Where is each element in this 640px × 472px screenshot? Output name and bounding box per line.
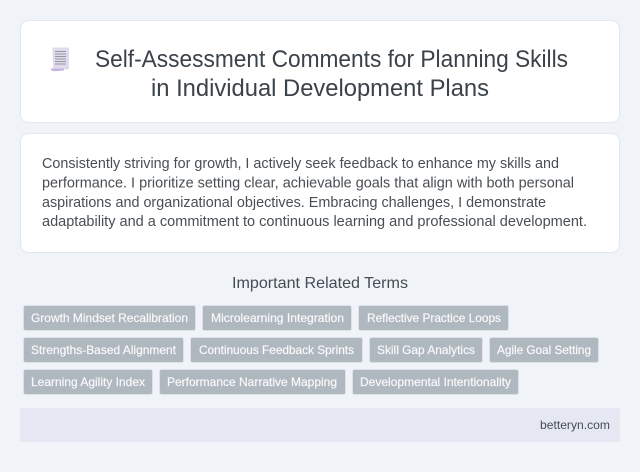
tag: skill gap analytics <box>370 338 482 362</box>
tag list <box>24 306 598 394</box>
tag: growth mindset recalibration: Growth Mindset Recalibration <box>31 311 188 325</box>
tag: continuous feedback sprints <box>190 338 362 362</box>
tag: strengths-based alignment <box>24 338 184 362</box>
tag: agile goal setting <box>490 338 598 362</box>
tag: strengths-based alignment: Strengths-Based Alignment <box>31 343 177 357</box>
tag: performance narrative mapping <box>160 370 346 394</box>
title <box>95 46 568 102</box>
paragraph text: aspirations and organizational objectives. Embracing challenges, I demonstrate <box>42 195 546 211</box>
tag: developmental intentionality: Developmental Intentionality <box>360 375 511 389</box>
tag: continuous feedback sprints: Continuous Feedback Sprints <box>199 343 354 357</box>
paragraph text <box>42 156 587 230</box>
tag: reflective practice loops: Reflective Practice Loops <box>367 311 501 325</box>
tag: skill gap analytics: Skill Gap Analytics <box>377 343 475 357</box>
panel: summary paragraph <box>20 134 620 252</box>
heading: important related terms: Important Related Terms <box>232 275 408 292</box>
tag: reflective practice loops <box>358 306 508 330</box>
paragraph text: performance. I prioritize setting clear, achievable goals that align with both personal <box>42 176 574 192</box>
icon: document scroll <box>50 48 69 71</box>
tag: developmental intentionality <box>352 370 518 394</box>
tag: microlearning integration <box>202 306 352 330</box>
paragraph text: adaptability and a commitment to continuous learning and professional development. <box>42 214 587 230</box>
footer source text: betteryn.com <box>540 418 610 432</box>
tag: microlearning integration: Microlearning Integration <box>211 311 344 325</box>
paragraph text: Consistently striving for growth, I actively seek feedback to enhance my skills and <box>42 156 559 172</box>
tag: learning agility index <box>24 370 152 394</box>
tag: performance narrative mapping: Performance Narrative Mapping <box>167 375 337 389</box>
tag: agile goal setting: Agile Goal Setting <box>497 343 591 357</box>
tag: growth mindset recalibration <box>24 306 196 330</box>
footer bar <box>20 408 620 442</box>
tag: learning agility index: Learning Agility Index <box>31 375 145 389</box>
panel: title card <box>20 20 620 122</box>
title: in Individual Development Plans <box>151 75 489 102</box>
title: Self-Assessment Comments for Planning Skills <box>95 46 568 73</box>
